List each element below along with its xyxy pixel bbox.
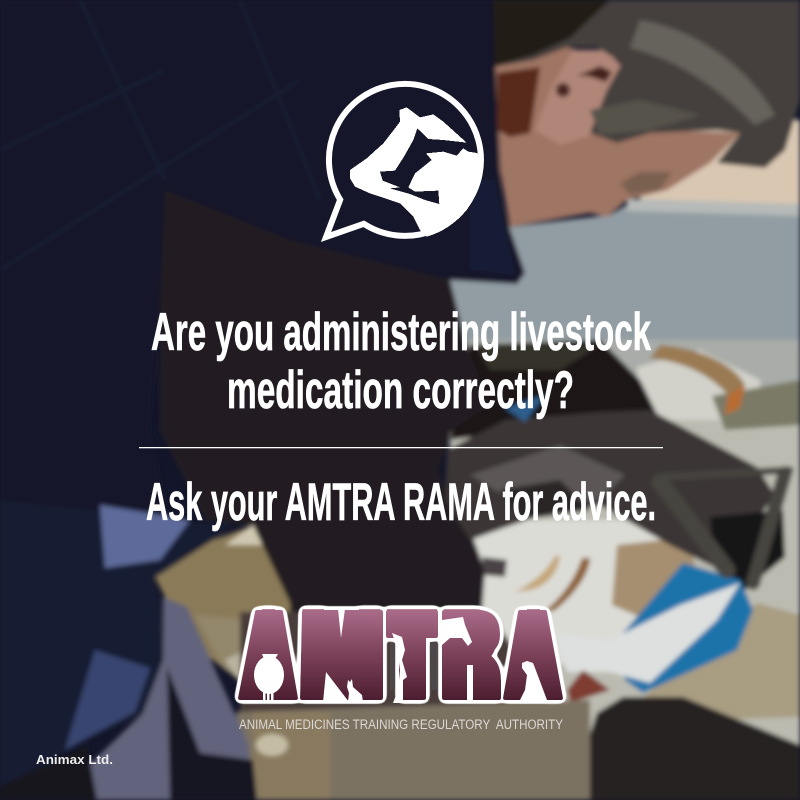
navy quilted vest and collar [0, 0, 525, 520]
AMTRA logo [240, 581, 561, 728]
icon: cow and sheep silhouettes [350, 107, 483, 237]
photo credit: Animax Ltd. [36, 752, 113, 767]
logo wordmark: A [506, 581, 561, 728]
logo wordmark: R [438, 581, 502, 728]
logo tagline: ANIMAL MEDICINES TRAINING REGULATORY AUTHORITY [239, 717, 563, 732]
trousers [0, 597, 257, 800]
metal drench tool [660, 470, 790, 583]
wall behind man [440, 120, 800, 420]
icon: sheep [254, 654, 284, 701]
man's grey hair [480, 0, 800, 168]
logo wordmark [240, 581, 561, 728]
heading: question [151, 303, 651, 420]
black sheep body [445, 395, 785, 590]
icon: horse head [442, 617, 472, 646]
brown sweater [160, 190, 490, 612]
sheep and work area, right [450, 340, 800, 800]
man's face and ear [495, 47, 740, 227]
logo wordmark: A [241, 581, 296, 728]
icon: speech bubble outline [326, 84, 481, 237]
tan curls [515, 556, 590, 615]
heading: question: medication correctly? [227, 361, 574, 420]
lower vest [0, 500, 233, 787]
icon: cat [347, 679, 363, 702]
logo slits between letter strokes [323, 609, 473, 702]
icon: horse tail [392, 633, 407, 703]
dark sheep head, bottom right [587, 697, 800, 800]
icon: speech bubble with livestock silhouettes [326, 84, 483, 237]
logo wordmark: T [386, 581, 438, 728]
logo wordmark: M [295, 581, 388, 728]
blue glove and hand [555, 563, 753, 703]
sand and straw, centre bottom [155, 525, 590, 800]
gaps around the T stem [390, 642, 437, 691]
divider line [139, 447, 663, 448]
icon: dog [520, 661, 547, 700]
